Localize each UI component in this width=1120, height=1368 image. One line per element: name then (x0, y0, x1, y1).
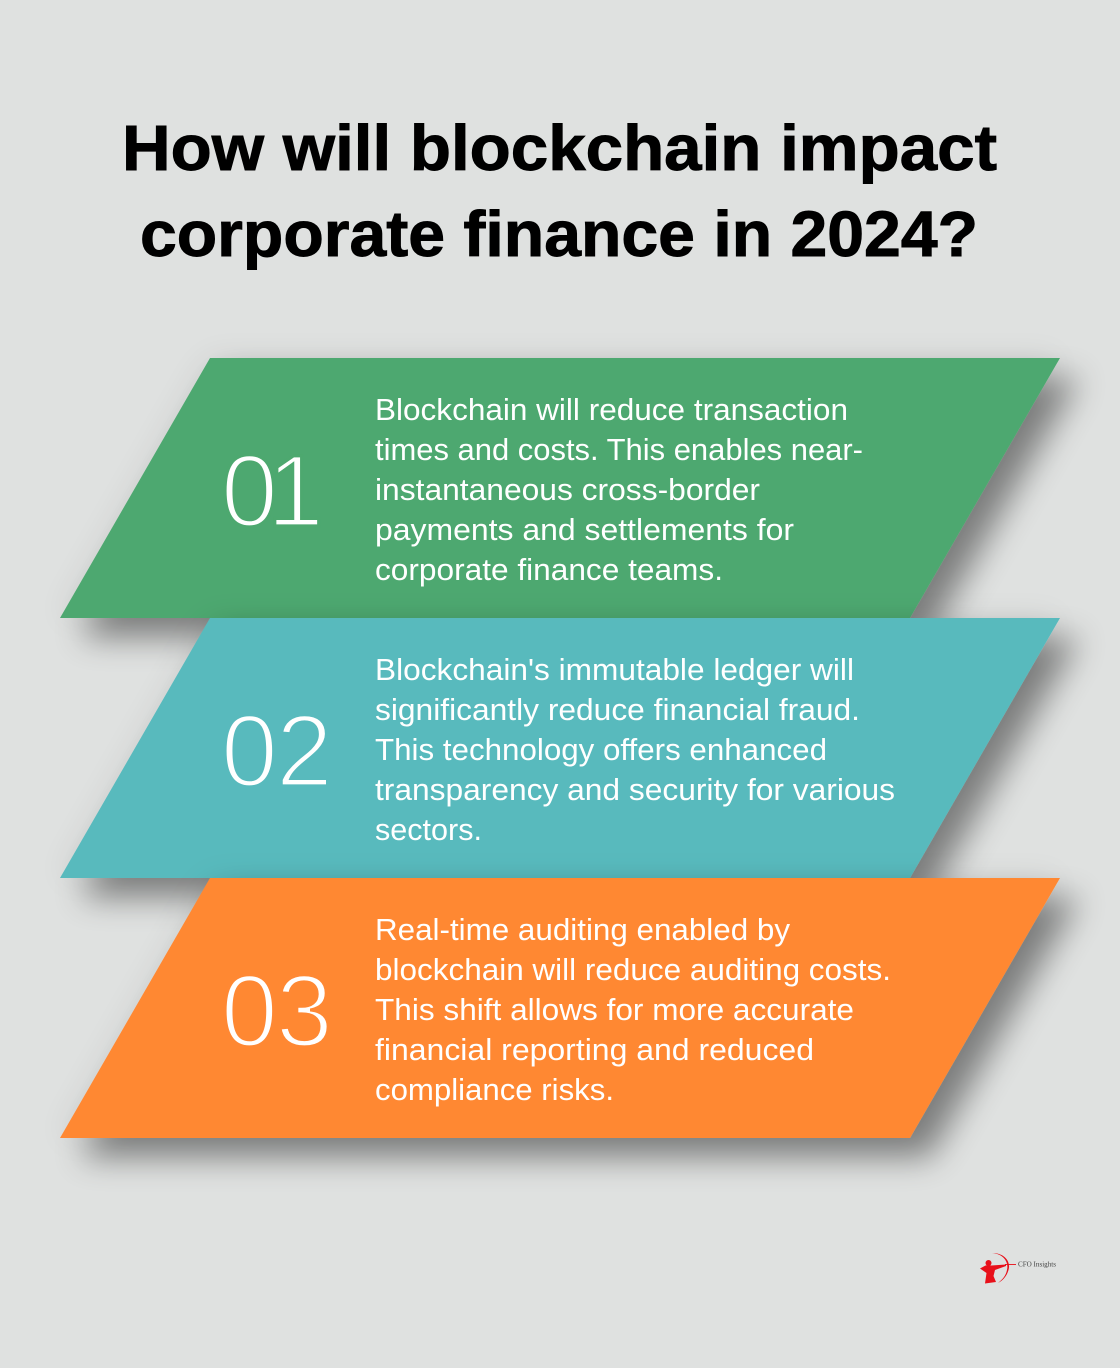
step 03 number: 03 (221, 954, 333, 1068)
title: How will blockchain impact (122, 112, 997, 184)
step 01 text (375, 393, 863, 587)
step 01 shape (60, 358, 1060, 618)
step 01 text: times and costs. This enables near- (375, 433, 863, 467)
step 02 number: 02 (221, 694, 333, 808)
logo text: CFO Insights (1018, 1260, 1056, 1268)
step 01 text: payments and settlements for (375, 513, 794, 547)
step 02 text: significantly reduce financial fraud. (375, 693, 860, 727)
title (122, 112, 997, 270)
step 02 text: sectors. (375, 813, 482, 847)
step 01 number: 01 (221, 434, 324, 548)
step 02 shape (60, 618, 1060, 878)
panel: step 02 (60, 618, 1060, 878)
icon: red archer (980, 1253, 1016, 1284)
step 01 text: Blockchain will reduce transaction (375, 393, 848, 427)
step 02 text: This technology offers enhanced (375, 733, 827, 767)
step 03 text: Real-time auditing enabled by (375, 913, 791, 947)
step 02 text: transparency and security for various (375, 773, 895, 807)
logo: CFO Insights (980, 1253, 1056, 1284)
step 01 text: instantaneous cross-border (375, 473, 760, 507)
step 02 text (375, 653, 895, 847)
step 03 shape (60, 878, 1060, 1138)
panel: step 03 (60, 878, 1060, 1138)
step 03 text (375, 913, 891, 1107)
step 01 text: corporate finance teams. (375, 553, 723, 587)
step 03 text: This shift allows for more accurate (375, 993, 854, 1027)
step 03 text: compliance risks. (375, 1073, 614, 1107)
panel: step 01 (60, 358, 1060, 618)
step 03 text: blockchain will reduce auditing costs. (375, 953, 891, 987)
title: corporate finance in 2024? (140, 198, 978, 270)
step 02 text: Blockchain's immutable ledger will (375, 653, 854, 687)
step 03 text: financial reporting and reduced (375, 1033, 814, 1067)
